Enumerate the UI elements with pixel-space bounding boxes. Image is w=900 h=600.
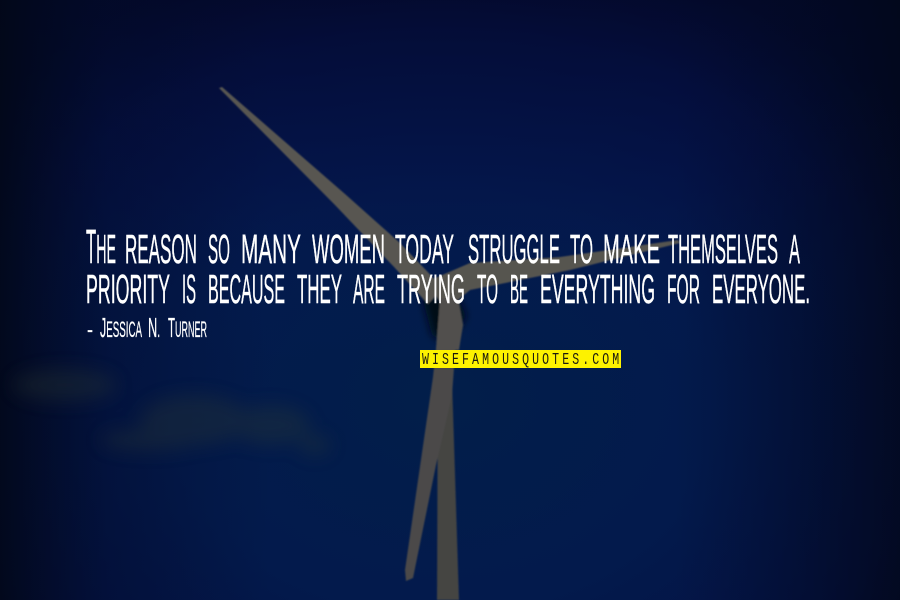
attribution: N. <box>148 312 160 343</box>
line 2 <box>86 266 810 312</box>
line 2: ARE <box>353 266 385 312</box>
line 1: THE <box>86 221 116 274</box>
line 1: SO <box>208 226 230 272</box>
line 2: PRIORITY <box>86 266 170 312</box>
line 2: TO <box>477 266 498 312</box>
line 1: MAKE <box>603 226 660 272</box>
upper left blade <box>219 87 443 304</box>
line 1: WOMEN <box>312 226 385 272</box>
line 1: REASON <box>125 226 197 272</box>
right blade <box>426 240 680 310</box>
line 1: TODAY <box>395 226 454 272</box>
line 1: MANY <box>241 226 301 272</box>
lower blade <box>405 330 456 581</box>
quote text <box>86 221 810 312</box>
quote text: A <box>789 226 800 272</box>
attribution: JESSICA <box>100 312 142 343</box>
line 1 <box>86 221 800 274</box>
line 2: BE <box>510 266 528 312</box>
nacelle shadow <box>422 296 466 345</box>
line 2: FOR <box>667 266 700 312</box>
tower <box>437 345 459 600</box>
watermark badge: WISEFAMOUSQUOTES.COM <box>422 351 619 370</box>
hub and root <box>436 298 463 350</box>
attribution: - <box>87 317 93 342</box>
line 2: BECAUSE <box>208 266 285 312</box>
line 1: TO <box>570 226 593 272</box>
wind turbine <box>219 87 680 600</box>
line 2: EVERYTHING <box>540 266 655 312</box>
line 2: IS <box>182 266 196 312</box>
line 2: TRYING <box>397 266 465 312</box>
faint clouds <box>13 369 331 455</box>
line 2: THEY <box>297 266 342 312</box>
poster: TURNER <box>168 312 207 343</box>
line 1: STRUGGLE <box>468 226 560 272</box>
